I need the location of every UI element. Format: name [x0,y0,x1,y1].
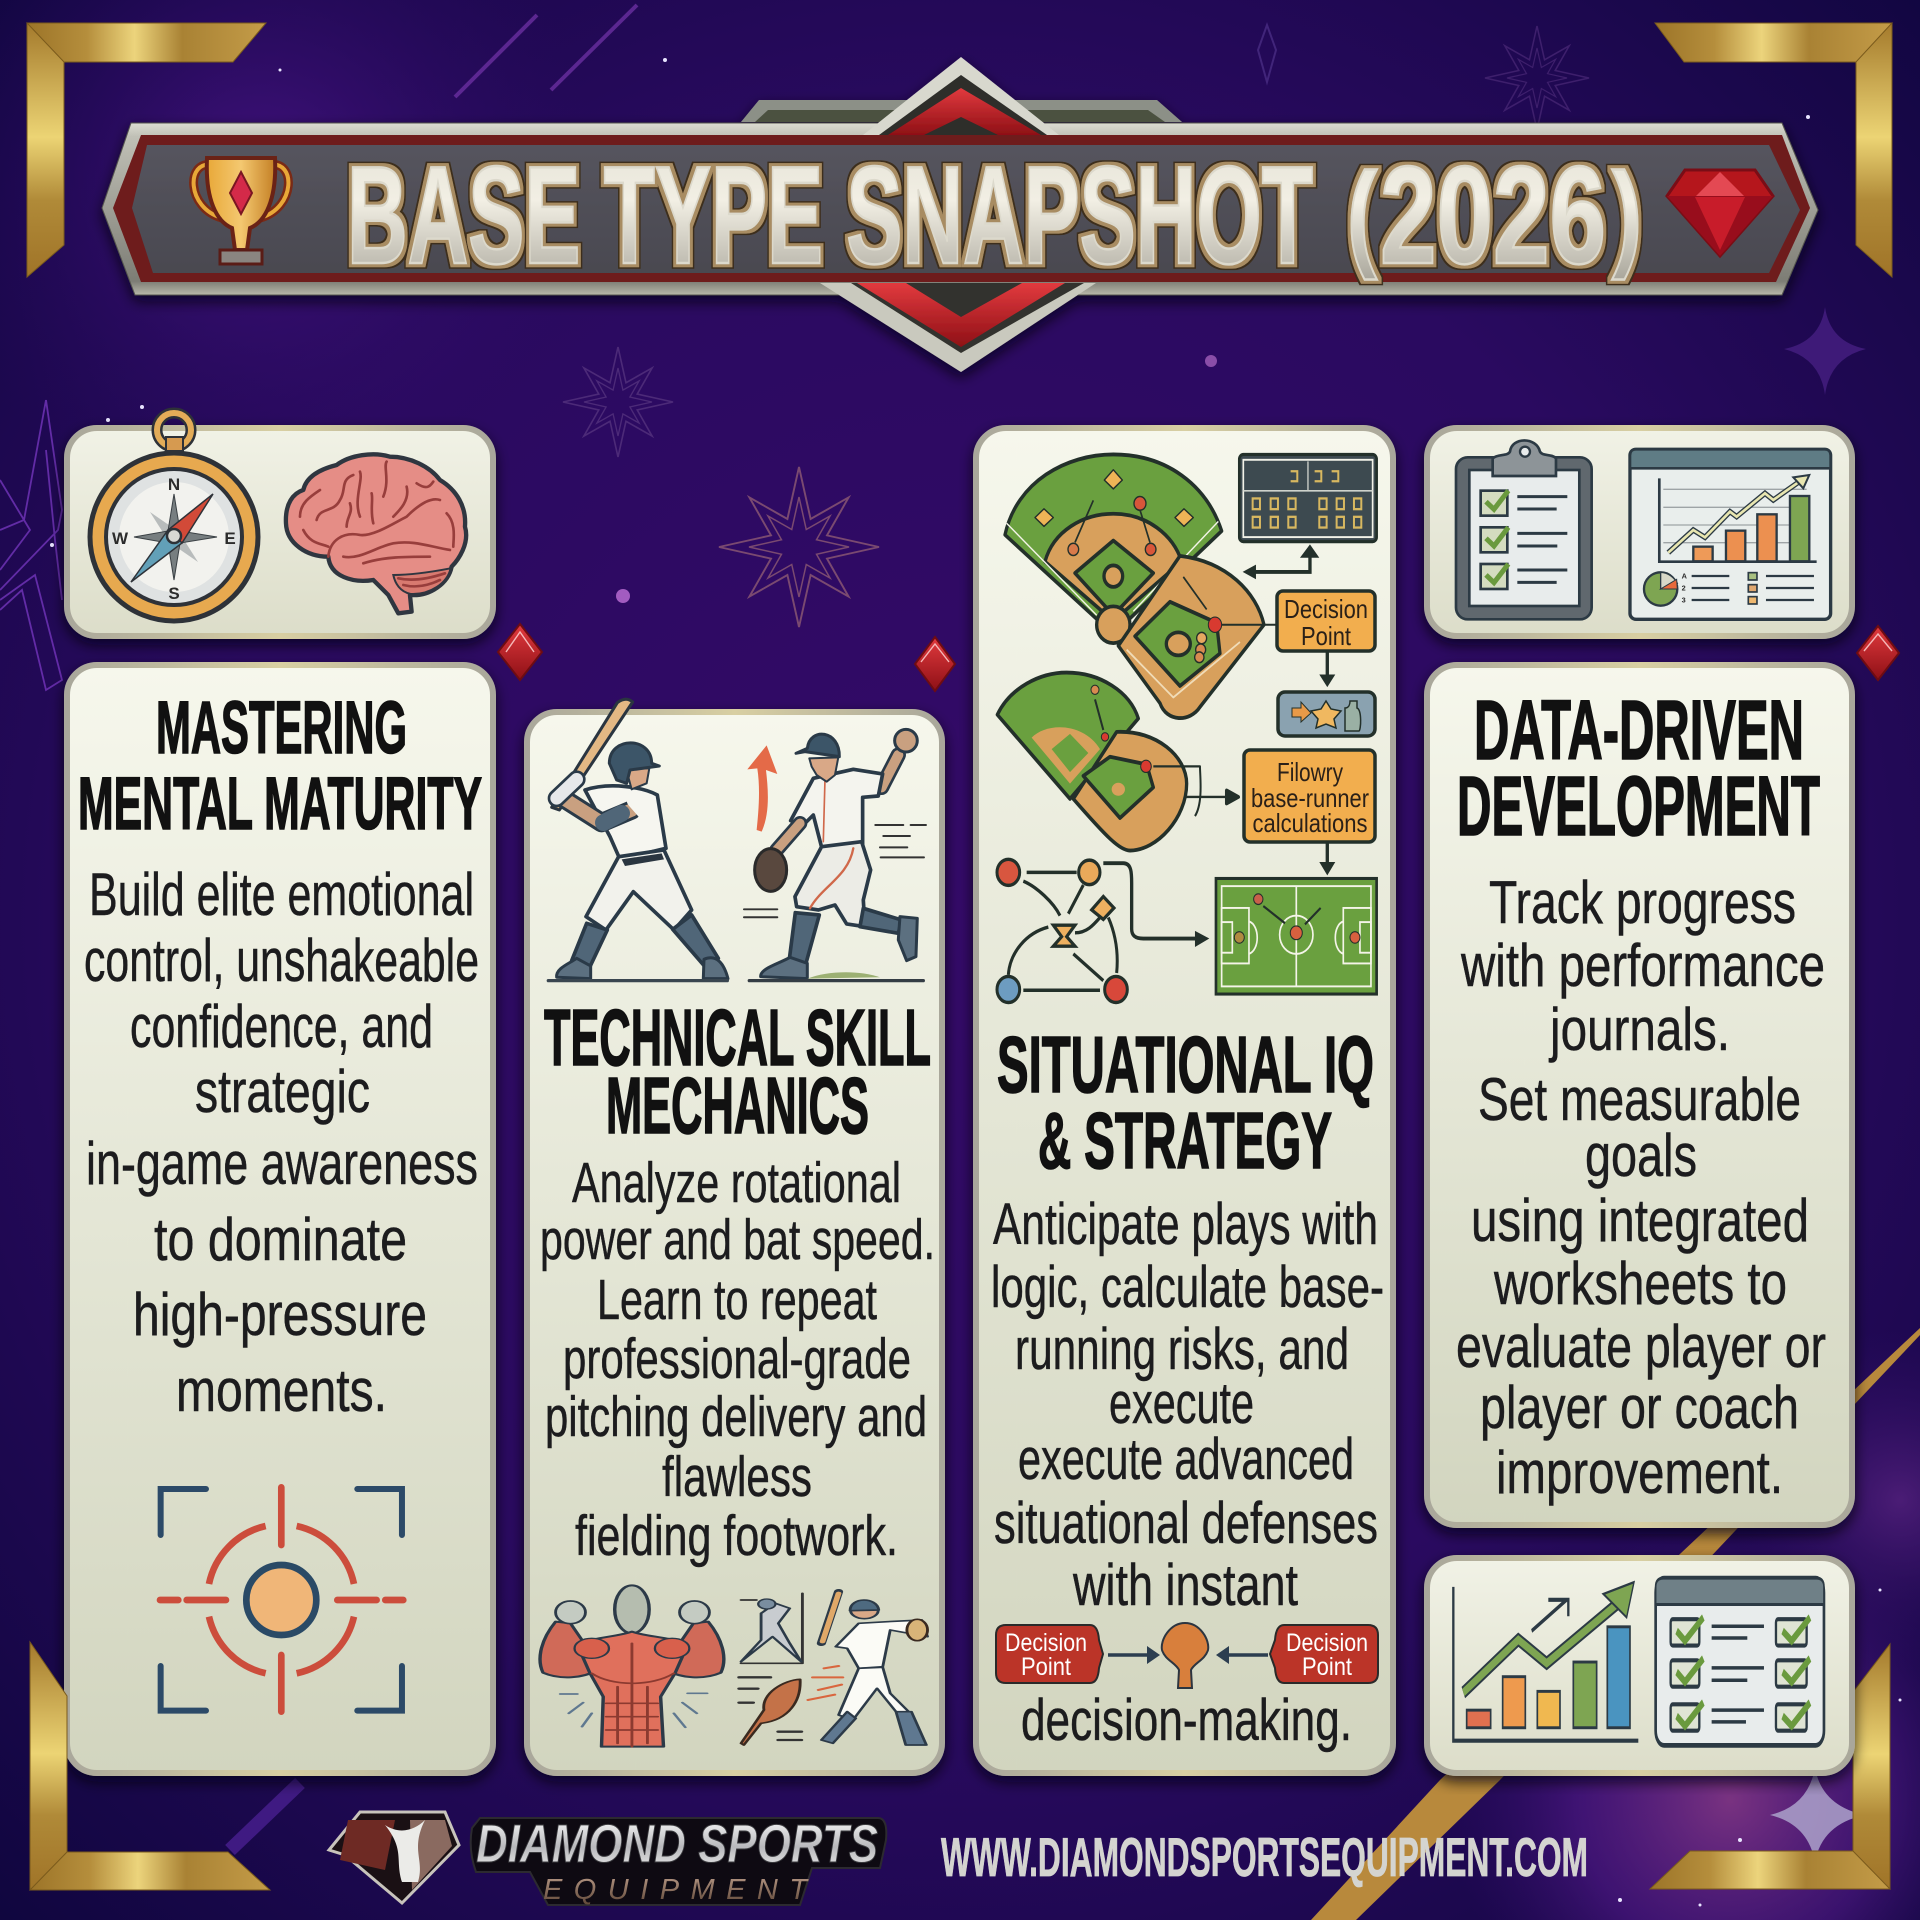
label box: decision point: Decision [1284,594,1368,624]
icon: analytics dashboard: 2 [1682,584,1686,593]
body text: data-driven: goals [1585,1122,1697,1189]
body text: data-driven: evaluate player or [1456,1313,1826,1380]
body text: technical skill: power and bat speed. [540,1208,935,1272]
title text: ) [1612,149,1642,281]
icon: trophy [194,158,288,264]
decision point row: Point [1302,1653,1352,1681]
wordmark: diamond sports equipment: EQUIPMENT [543,1874,809,1906]
body text: situational iq: with instant [1072,1553,1298,1618]
illustration: batter and pitcher [548,699,926,981]
label box: decision point: Point [1301,621,1352,651]
illustration: muscles, glove and athletes [540,1585,928,1747]
panel: situational iq and strategy [976,428,1393,1773]
title text: BASE TYPE SNAPSHOT [347,138,1313,293]
label box: decision point [1277,591,1375,651]
body text: situational iq: execute [1109,1371,1254,1436]
body text: technical skill: fielding footwork. [575,1504,898,1568]
body text: situational iq: Anticipate plays with [993,1192,1378,1257]
icon: compass: N [168,475,180,494]
panel: compass and brain icons [67,413,493,636]
body text: data-driven: player or coach [1480,1374,1799,1441]
icon: brain [286,454,466,613]
body text: technical skill: Learn to repeat [597,1268,877,1332]
icon: checklist window [1656,1578,1824,1745]
panel: clipboard and dashboard icons [1427,428,1852,636]
panel: growth chart and checklist icons [1427,1558,1852,1773]
body text: mental maturity: high-pressure [133,1281,427,1348]
decision point row: Decision [1286,1629,1368,1657]
body text: data-driven: worksheets to [1493,1250,1787,1317]
heading: technical skill mechanics: MECHANICS [606,1061,869,1150]
heading: mastering mental maturity: MASTERING [156,686,407,769]
logo mark: diamond [329,1812,459,1903]
body text: situational iq: logic, calculate base- [991,1255,1384,1320]
icon: compass: S [168,584,180,603]
body text: situational iq: execute advanced [1018,1427,1354,1492]
heading: mastering mental maturity [78,686,482,845]
body text: data-driven: Track progress [1489,869,1796,936]
footer brand logo [329,1812,886,1906]
body text: mental maturity: in-game awareness [86,1130,478,1197]
body text: mental maturity: to dominate [154,1206,407,1273]
icon: compass: W [112,529,129,548]
heading: technical skill mechanics: TECHNICAL SKILL [544,993,931,1082]
body text: mental maturity: Build elite emotional [89,861,474,928]
icon: analytics dashboard: A [1682,572,1688,581]
body text: mental maturity: confidence, and [130,993,433,1060]
body text: situational iq: situational defenses [994,1491,1378,1556]
panel: data-driven development [1427,665,1852,1525]
pitcher figure [744,729,926,981]
gold corner: top right [1655,23,1892,277]
body text: mental maturity: control, unshakeable [84,927,479,994]
body text: situational iq [991,1192,1384,1753]
body text: data-driven: Set measurable [1478,1066,1801,1133]
body text: situational iq: running risks, and [1015,1317,1349,1382]
panel: technical skill mechanics [527,699,942,1773]
heading: situational iq and strategy: SITUATIONAL IQ [997,1020,1374,1109]
gold corner: bottom right [1650,1644,1890,1889]
batter figure [548,699,728,981]
title banner [102,57,1818,372]
label box: base-runner calculations: Filowry [1277,757,1343,787]
body text: data-driven [1456,869,1826,1506]
wordmark: diamond sports equipment [471,1814,886,1906]
title text: ( [1347,149,1378,281]
heading: situational iq and strategy: & STRATEGY [1038,1096,1332,1185]
icon: red up arrow [747,745,777,832]
icon: clipboard checklist [1456,440,1592,619]
icon: compass: E [224,529,236,548]
body text: technical skill [540,1151,935,1568]
icon: analytics dashboard [1630,449,1831,619]
title text: 2026 [1380,138,1606,293]
icon: analytics dashboard: 3 [1682,596,1686,605]
decision point row: Point [1021,1653,1071,1681]
heading: mastering mental maturity: MENTAL MATURITY [78,762,482,845]
body text: technical skill: professional-grade [563,1327,911,1391]
illustration: strategy diagrams [997,454,1377,1002]
red gem separators [498,624,1899,691]
body text: technical skill: Analyze rotational [572,1151,901,1215]
decision point row: Decision [1005,1629,1087,1657]
body text: data-driven: using integrated [1471,1187,1809,1254]
icon: compass [90,413,258,621]
icon: target reticle [160,1487,403,1712]
body text: technical skill: flawless [662,1445,812,1509]
label box: base-runner calculations: base-runner [1251,783,1369,813]
muscular torso [540,1585,724,1747]
small batter and glove [739,1593,843,1745]
icon strip: arrow, star, figure [1278,692,1375,736]
body text: mental maturity: strategic [195,1058,370,1125]
gold corner: bottom left [30,1642,270,1890]
heading: technical skill mechanics [544,993,931,1150]
body text: data-driven: with performance [1460,932,1825,999]
scoreboard [1239,454,1377,542]
icon: ruby gem [1667,170,1773,256]
label box: base-runner calculations: calculations [1252,808,1368,838]
icon: growth bar chart [1453,1582,1638,1741]
flow diagram [997,859,1127,1002]
panel: mastering mental maturity [67,665,493,1773]
body text: situational iq: decision-making. [1021,1688,1352,1753]
gold corner: top left [27,23,266,277]
connector arrows [1103,544,1335,947]
label box: base-runner calculations [1244,750,1375,842]
body text: technical skill: pitching delivery and [545,1385,927,1449]
body text: data-driven: improvement. [1496,1439,1783,1506]
heading: data-driven development [1457,683,1820,853]
small fielder [821,1592,928,1745]
heading: situational iq and strategy [997,1020,1374,1185]
body text: data-driven: journals. [1548,996,1730,1063]
wordmark: diamond sports equipment: DIAMOND SPORTS [476,1814,878,1874]
decision point row [996,1623,1378,1688]
body text: mental maturity: moments. [176,1357,387,1424]
body text: mental maturity [84,861,479,1424]
baseball field diagrams [997,454,1277,851]
soccer pitch [1216,878,1377,994]
